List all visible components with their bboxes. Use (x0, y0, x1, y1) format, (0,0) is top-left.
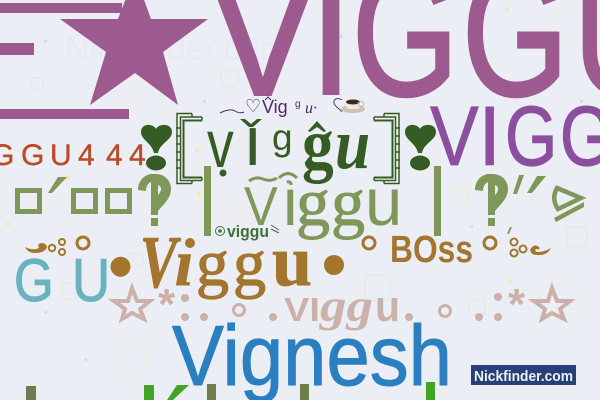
pink name: * (158, 280, 176, 329)
brown decorated name: ı (175, 227, 193, 300)
olive center name (204, 164, 584, 240)
heading bars and star glyph (0, 0, 208, 119)
large purple name (207, 0, 600, 134)
brown decorated name: u (272, 221, 312, 301)
teal name: U (72, 247, 110, 314)
icon: left heart exclamation (141, 125, 172, 170)
purple name right: G (505, 90, 557, 184)
dark green framed name: v (207, 106, 234, 181)
coffee decorated name (220, 96, 365, 117)
coffee decorated name: g (295, 99, 301, 110)
coffee decorated name: Vig (262, 97, 288, 117)
coffee decorated name: ♡ (245, 96, 261, 116)
icon: star right (534, 288, 570, 319)
dark green framed name: ı (243, 102, 262, 180)
dark green framed name (141, 102, 436, 184)
right bracket (374, 114, 400, 184)
pink name (114, 280, 570, 331)
purple name right: V (430, 89, 479, 183)
icon: olive question mark right (475, 174, 508, 226)
small green name: viggu (227, 222, 269, 241)
olive center name: V (244, 176, 278, 237)
faint watermark background: Nickfinder.com (65, 30, 288, 68)
pink name: VI (284, 291, 320, 328)
purple name right (430, 89, 600, 184)
icon: right heart exclamation (405, 125, 436, 170)
dark green framed name: u (335, 104, 370, 184)
bottom cropped name (26, 382, 435, 400)
dark green framed name: g (302, 104, 334, 184)
olive center name: u (365, 165, 402, 240)
logo: Nickfinder: Nickfinder.com (474, 369, 573, 385)
brown boss name (363, 229, 551, 271)
brown decorated name: g (196, 227, 229, 300)
brown decorated name: V (140, 223, 182, 304)
brown decorated name: g (233, 227, 266, 300)
brown boss name: BOss (390, 229, 473, 271)
icon: olive question mark (138, 174, 171, 226)
olive squares name (15, 174, 171, 226)
teal name: G (14, 247, 54, 314)
olive center name: g (331, 164, 365, 240)
icon: star left (114, 288, 150, 319)
pink name: gg (319, 280, 373, 331)
pink name: u (375, 282, 400, 331)
coffee decorated name: u· (305, 100, 317, 117)
left bracket (176, 114, 202, 184)
purple name right: I (478, 89, 501, 183)
olive center name: ı (281, 165, 300, 240)
dark green framed name: g (272, 117, 293, 158)
pink name: * (508, 280, 526, 329)
brown decorated name (25, 221, 344, 304)
olive center name: g (296, 164, 330, 240)
teal name (14, 247, 110, 314)
icon: coffee cup (341, 100, 365, 113)
